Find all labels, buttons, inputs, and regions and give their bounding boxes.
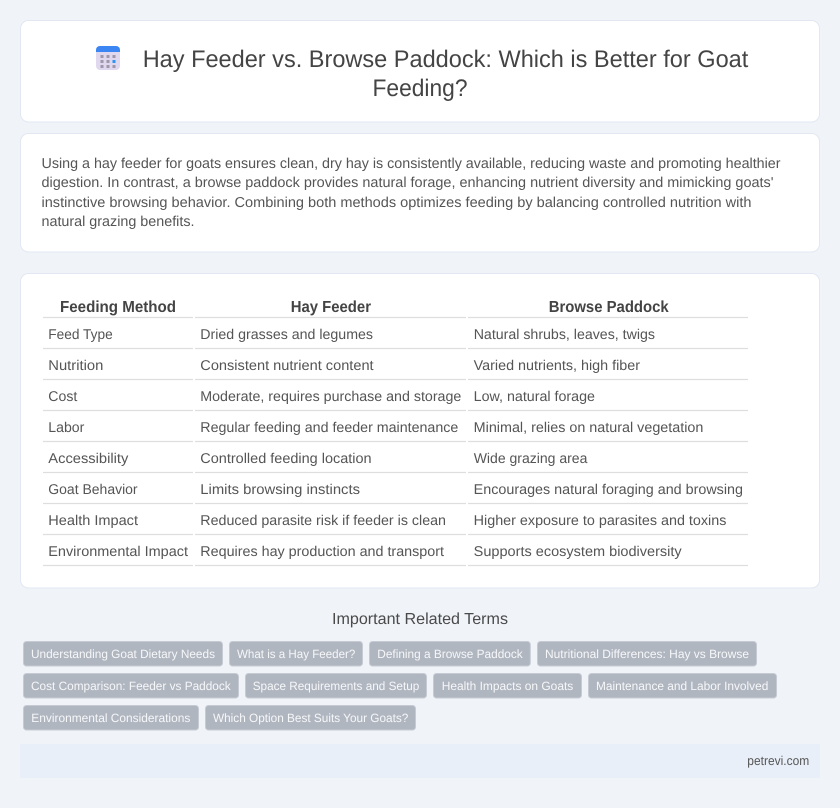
row: environmental impact: Requires hay production and transport [200,544,444,560]
row: health impact [43,513,748,534]
tag: maintenance and labor [588,674,776,698]
icon: calendar [96,46,120,70]
row: goat behavior: Goat Behavior [48,482,138,498]
text block: description paragraph: Using a hay feeder for goats ensures clean, dry hay is consistently available, reducing waste and promoting healthier [42,156,781,172]
tag: health impacts [434,674,582,698]
tag: environmental considerations [24,706,198,730]
tag: maintenance and labor: Maintenance and Labor Involved [596,679,768,693]
row: environmental impact: Environmental Impact [48,544,188,560]
row: accessibility: Controlled feeding location [200,451,372,467]
tag: nutritional differences [538,642,756,666]
row: accessibility [43,451,748,472]
table header row [43,299,748,318]
footer [20,744,820,778]
tag: space requirements: Space Requirements and Setup [253,679,420,693]
row: labor: Labor [48,420,85,436]
row: nutrition: Nutrition [48,358,103,374]
table header row: Hay Feeder [291,299,371,316]
title: Hay Feeder vs. Browse Paddock: Which is Better for Goat [143,46,749,73]
tag: cost comparison: Cost Comparison: Feeder vs Paddock [31,679,232,693]
panel: title header [20,20,820,122]
title [143,46,749,102]
tag: which option best suits: Which Option Best Suits Your Goats? [213,711,409,725]
footer: petrevi.com [747,753,809,768]
tag: what is a hay feeder: What is a Hay Feeder? [237,647,356,661]
tag: environmental considerations: Environmental Considerations [31,711,190,725]
row: feed type: Feed Type [48,327,113,343]
panel: comparison table [20,274,820,588]
tag: defining a browse paddock [370,642,530,666]
row: goat behavior: Encourages natural foraging and browsing [474,482,743,498]
row: cost: Cost [48,389,77,405]
row: nutrition: Varied nutrients, high fiber [474,358,640,374]
tag: cost comparison [24,674,238,698]
heading: important related terms: Important Related Terms [332,611,508,628]
text block: description paragraph: instinctive browsing behavior. Combining both methods optimizes feeding by balancing controlled nutrition with [42,195,752,211]
row: nutrition: Consistent nutrient content [200,358,374,374]
row: accessibility: Wide grazing area [474,451,588,467]
tag: understanding goat dietary needs: Understanding Goat Dietary Needs [31,647,215,661]
row: nutrition [43,358,748,380]
row: feed type [43,327,748,348]
row: goat behavior: Limits browsing instincts [200,482,360,498]
row: environmental impact: Supports ecosystem biodiversity [474,544,683,560]
row: accessibility: Accessibility [48,451,129,467]
tag: health impacts: Health Impacts on Goats [442,679,573,693]
tag: nutritional differences: Nutritional Differences: Hay vs Browse [545,647,749,661]
row: health impact: Higher exposure to parasites and toxins [474,513,726,529]
text block: description paragraph [42,156,781,230]
row: cost: Moderate, requires purchase and storage [200,389,461,405]
row: labor: Regular feeding and feeder maintenance [200,420,458,436]
row: health impact: Reduced parasite risk if feeder is clean [200,513,446,529]
row: environmental impact [43,544,748,566]
tag: understanding goat dietary needs [24,642,222,666]
row: labor: Minimal, relies on natural vegetation [474,420,703,436]
tag: which option best suits [206,706,416,730]
row: cost [43,389,748,410]
row: cost: Low, natural forage [474,389,595,405]
panel: description [20,134,820,252]
tag: what is a hay feeder [230,642,362,666]
row: feed type: Dried grasses and legumes [200,327,373,343]
row: labor [43,420,748,442]
table header row: Browse Paddock [549,299,669,316]
text block: description paragraph: natural grazing benefits. [42,214,194,230]
row: feed type: Natural shrubs, leaves, twigs [474,327,655,343]
text block: description paragraph: digestion. In contrast, a browse paddock provides natural forage, enhancing nutrient diversity and mimicking goats' [42,175,774,191]
row: goat behavior [43,482,748,504]
tag: space requirements [246,674,426,698]
tag: defining a browse paddock: Defining a Browse Paddock [377,647,524,661]
title: Feeding? [372,75,468,102]
row: health impact: Health Impact [48,513,138,529]
table header row: Feeding Method [60,299,176,316]
panel: related term tags [24,642,776,730]
